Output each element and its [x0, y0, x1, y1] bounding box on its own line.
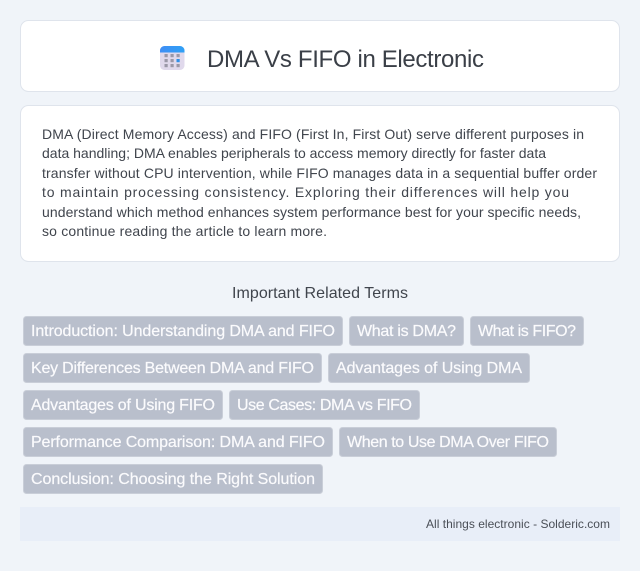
tag: what is DMA [350, 316, 464, 346]
tag: advantages FIFO: Advantages of Using FIFO [31, 397, 215, 414]
description text: transfer without CPU intervention, while FIFO manages data in a sequential buffer order [42, 165, 597, 181]
description text: DMA (Direct Memory Access) and FIFO (First In, First Out) serve different purposes in [42, 126, 584, 142]
tag: when to use [340, 428, 556, 456]
icon: calendar [160, 46, 184, 70]
description text: to maintain processing consistency. Exploring their differences will help you [42, 184, 569, 200]
tag: introduction [24, 316, 342, 346]
description text: understand which method enhances system performance best for your specific needs, [42, 204, 581, 220]
tag: when to use: When to Use DMA Over FIFO [347, 434, 549, 451]
tag: use cases [230, 390, 420, 420]
tag: what is FIFO [470, 316, 584, 346]
tag: use cases: Use Cases: DMA vs FIFO [237, 397, 412, 414]
footer: All things electronic - Solderic.com [426, 517, 610, 531]
tag: advantages DMA [328, 354, 530, 382]
tag: conclusion [24, 464, 322, 494]
tag: advantages DMA: Advantages of Using DMA [336, 360, 522, 377]
panel: description [20, 106, 620, 262]
description text [42, 126, 597, 239]
footer [20, 507, 620, 541]
tag: introduction: Introduction: Understanding DMA and FIFO [31, 323, 335, 340]
tag: conclusion: Conclusion: Choosing the Right Solution [31, 471, 315, 488]
tag: what is FIFO: What is FIFO? [478, 323, 576, 340]
tag: performance comparison: Performance Comparison: DMA and FIFO [31, 434, 325, 451]
title text: DMA Vs FIFO in Electronic [207, 46, 484, 73]
tag: what is DMA: What is DMA? [357, 323, 456, 340]
description text: data handling; DMA enables peripherals to access memory directly for faster data [42, 145, 546, 161]
tag: key differences: Key Differences Between DMA and FIFO [31, 360, 314, 377]
tag: advantages FIFO [24, 390, 222, 420]
panel: related term tags [24, 316, 584, 494]
heading: related terms: Important Related Terms [232, 285, 408, 302]
panel: title [20, 20, 620, 92]
tag: key differences [24, 354, 322, 382]
tag: performance comparison [24, 428, 332, 456]
description text: so continue reading the article to learn more. [42, 223, 327, 239]
